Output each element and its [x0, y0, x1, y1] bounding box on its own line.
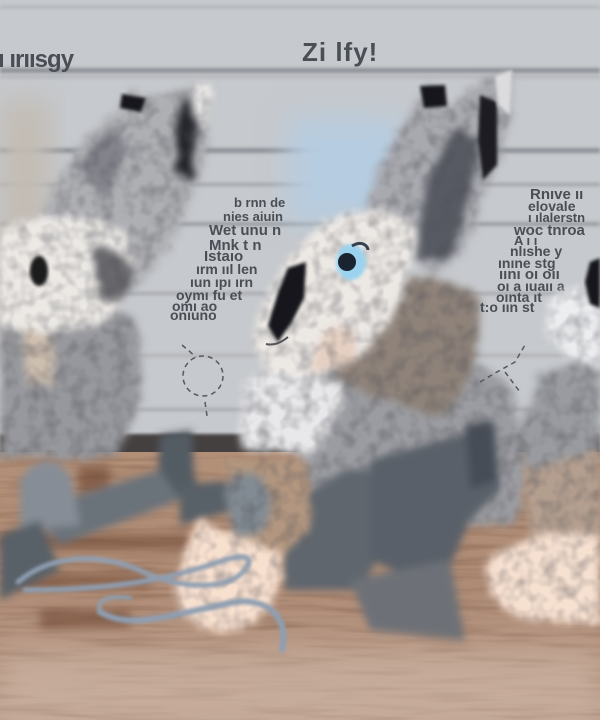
- centre paw: [176, 458, 312, 632]
- text block: right: elovale: [528, 198, 576, 214]
- text block: left: omı ao: [172, 298, 217, 314]
- text block: right: ıını oı oıı: [499, 266, 560, 283]
- centre husky blue eye: [336, 243, 368, 280]
- text block: left: nies aiuin: [223, 209, 283, 224]
- decorative doodle marks: [480, 345, 525, 392]
- wooden floor: [0, 452, 600, 720]
- text block: left: oymı fu et: [176, 287, 242, 303]
- wall background: [0, 0, 600, 440]
- text block: left: Mnk t n: [209, 237, 262, 254]
- text block: right: ı ılalerstn: [528, 210, 585, 225]
- centre husky mouth: [266, 337, 288, 345]
- text block: left: b rnn de: [234, 195, 285, 210]
- dumbbell and harness: [0, 420, 500, 640]
- text block: left: Istaıo: [204, 248, 243, 265]
- text block: right: t:o ıın st: [480, 299, 535, 315]
- text block: left: [170, 195, 285, 323]
- centre husky cheek: [335, 279, 479, 415]
- left plush husky: [0, 80, 212, 458]
- centre husky forehead and ears: [365, 70, 511, 272]
- text block: right: woc tnroa: [513, 222, 585, 239]
- left husky ear tip: [120, 94, 146, 112]
- left husky eye: [30, 256, 48, 286]
- text block: right: [480, 186, 585, 315]
- centre husky face: [254, 211, 415, 375]
- centre plush husky: [240, 70, 524, 525]
- decorative doodle circle: [182, 345, 223, 416]
- text block: right: nlıshe y: [510, 243, 562, 259]
- text block: right: Rnıve ıı: [530, 186, 583, 203]
- text block: left: ıun ıpı ırn: [190, 274, 253, 290]
- right husky nose: [585, 258, 600, 308]
- text block: right: oınta ıt: [496, 289, 542, 305]
- centre husky chest: [240, 373, 345, 455]
- text block: right: A ı ı: [514, 233, 537, 248]
- baseboard: [0, 434, 600, 456]
- heading: left fragment: ı ırıısgy: [0, 46, 75, 73]
- text block: left: Wet unu n: [209, 222, 281, 239]
- centre husky ear markings: [420, 70, 512, 180]
- heading: centre: Zi lfy!: [302, 37, 378, 67]
- text block: right: oı a ıuaıı a: [497, 278, 565, 294]
- centre husky body: [290, 351, 524, 525]
- centre husky nose stripe: [268, 262, 306, 342]
- text block: left: onıuno: [170, 307, 217, 323]
- leash: [18, 557, 284, 650]
- text block: left: ırm ııl len: [196, 261, 257, 277]
- right plush husky: [487, 290, 600, 625]
- text block: right: ınıne stg: [498, 255, 556, 271]
